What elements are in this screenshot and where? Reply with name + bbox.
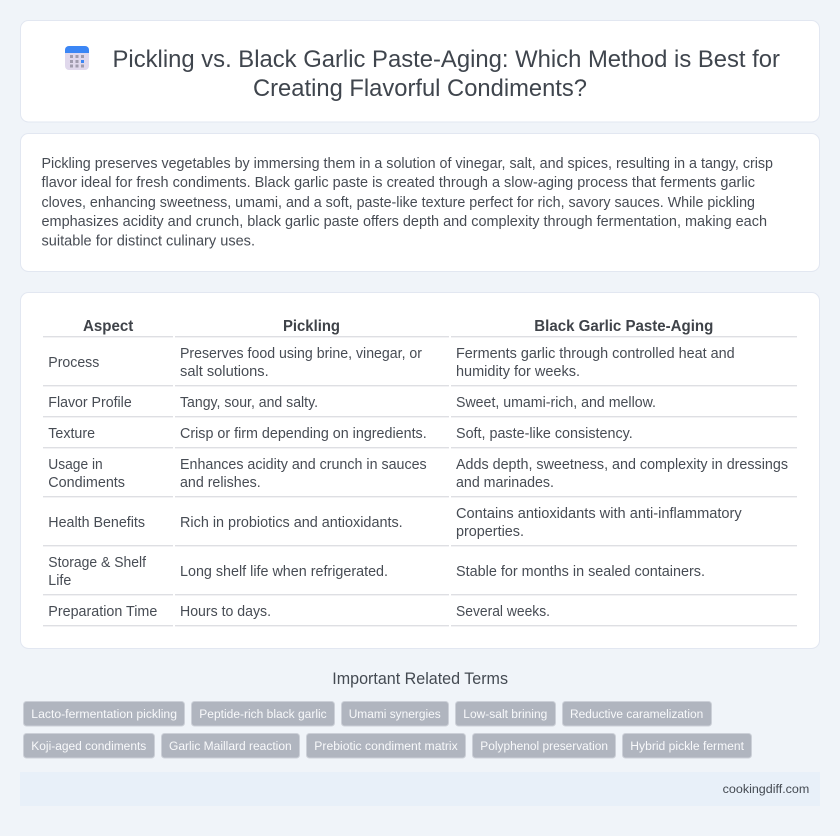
row: health benefits: Contains antioxidants with anti-inflammatory: [456, 506, 743, 522]
tag: Umami synergies: [349, 707, 441, 721]
row: texture: [48, 426, 633, 442]
tag list: related terms: [24, 702, 752, 758]
tag: [192, 702, 334, 726]
row: preparation time: Several weeks.: [456, 604, 550, 620]
panel: introduction: [20, 134, 820, 272]
tag: Hybrid pickle ferment: [630, 739, 745, 753]
title: Pickling vs. Black Garlic Paste-Aging: Which Method is Best for: [112, 46, 780, 73]
text block: introduction: emphasizes acidity and crunch, black garlic paste offers depth and complexity through fermentation, making each: [42, 214, 767, 230]
text block: introduction: suitable for distinct culinary uses.: [42, 234, 255, 250]
tag: Peptide-rich black garlic: [199, 707, 327, 721]
table header: Black Garlic Paste-Aging: [534, 318, 713, 335]
tag: Prebiotic condiment matrix: [314, 739, 458, 753]
tag: [24, 702, 184, 726]
row: texture: Crisp or firm depending on ingredients.: [180, 426, 427, 442]
tag: [24, 734, 154, 758]
tag: [472, 734, 616, 758]
row: process: [48, 346, 735, 380]
row: health benefits: [48, 506, 743, 540]
heading: important related terms: Important Related Terms: [332, 670, 508, 688]
row: texture: Soft, paste-like consistency.: [456, 426, 633, 442]
row: storage and shelf life: Life: [48, 573, 71, 589]
tag: Polyphenol preservation: [480, 739, 608, 753]
icon: calendar: [65, 46, 89, 70]
row: preparation time: [48, 604, 550, 620]
row: process: Process: [48, 355, 99, 371]
tag: [456, 702, 556, 726]
row: usage in condiments: Condiments: [48, 475, 125, 491]
tag: Reductive caramelization: [570, 707, 703, 721]
table header: Pickling: [283, 318, 340, 335]
row: usage in condiments: Adds depth, sweetness, and complexity in dressings: [456, 457, 788, 473]
tag: [342, 702, 448, 726]
title: Creating Flavorful Condiments?: [253, 75, 587, 102]
row: process: humidity for weeks.: [456, 364, 580, 380]
row: texture: Texture: [48, 426, 95, 442]
row: health benefits: Health Benefits: [48, 515, 145, 531]
row: usage in condiments: [48, 457, 788, 491]
row: usage in condiments: Enhances acidity and crunch in sauces: [180, 457, 427, 473]
row: process: Preserves food using brine, vinegar, or: [180, 346, 422, 362]
row: flavor profile: Sweet, umami-rich, and mellow.: [456, 395, 656, 411]
table header: Aspect: [83, 318, 133, 335]
table header: [83, 318, 713, 335]
row: preparation time: Hours to days.: [180, 604, 271, 620]
panel: header: [20, 20, 820, 122]
title: [112, 46, 780, 102]
text block: introduction: [42, 156, 773, 250]
row: health benefits: properties.: [456, 524, 524, 540]
row: health benefits: Rich in probiotics and antioxidants.: [180, 515, 403, 531]
row: flavor profile: Flavor Profile: [48, 395, 132, 411]
tag: Low-salt brining: [463, 707, 547, 721]
row: storage and shelf life: Stable for months in sealed containers.: [456, 564, 705, 580]
row: preparation time: Preparation Time: [48, 604, 157, 620]
tag: [562, 702, 712, 726]
tag: [162, 734, 300, 758]
tag: Lacto-fermentation pickling: [31, 707, 177, 721]
tag: Garlic Maillard reaction: [169, 739, 292, 753]
footer: cookingdiff.com: [723, 782, 809, 796]
tag: Koji-aged condiments: [31, 739, 146, 753]
row: usage in condiments: Usage in: [48, 457, 103, 473]
text block: introduction: cloves, enhancing sweetness, umami, and a soft, paste-like texture perfect for rich, savory sauces. While pickling: [42, 195, 755, 211]
row: storage and shelf life: [48, 555, 705, 589]
row: flavor profile: [48, 395, 656, 411]
text block: introduction: Pickling preserves vegetables by immersing them in a solution of vinegar, salt, and spices, resulting in a tangy, crisp: [42, 156, 773, 172]
row: process: salt solutions.: [180, 364, 269, 380]
text block: introduction: flavor ideal for fresh condiments. Black garlic paste is created through a slow-aging process that ferments garlic: [42, 175, 755, 191]
row: usage in condiments: and marinades.: [456, 475, 554, 491]
footer: [20, 772, 820, 806]
panel: comparison table: [20, 292, 820, 648]
tag: [306, 734, 466, 758]
row: flavor profile: Tangy, sour, and salty.: [180, 395, 318, 411]
row: storage and shelf life: Long shelf life when refrigerated.: [180, 564, 388, 580]
row: storage and shelf life: Storage & Shelf: [48, 555, 147, 571]
tag: [622, 734, 752, 758]
row: usage in condiments: and relishes.: [180, 475, 261, 491]
row: process: Ferments garlic through controlled heat and: [456, 346, 735, 362]
